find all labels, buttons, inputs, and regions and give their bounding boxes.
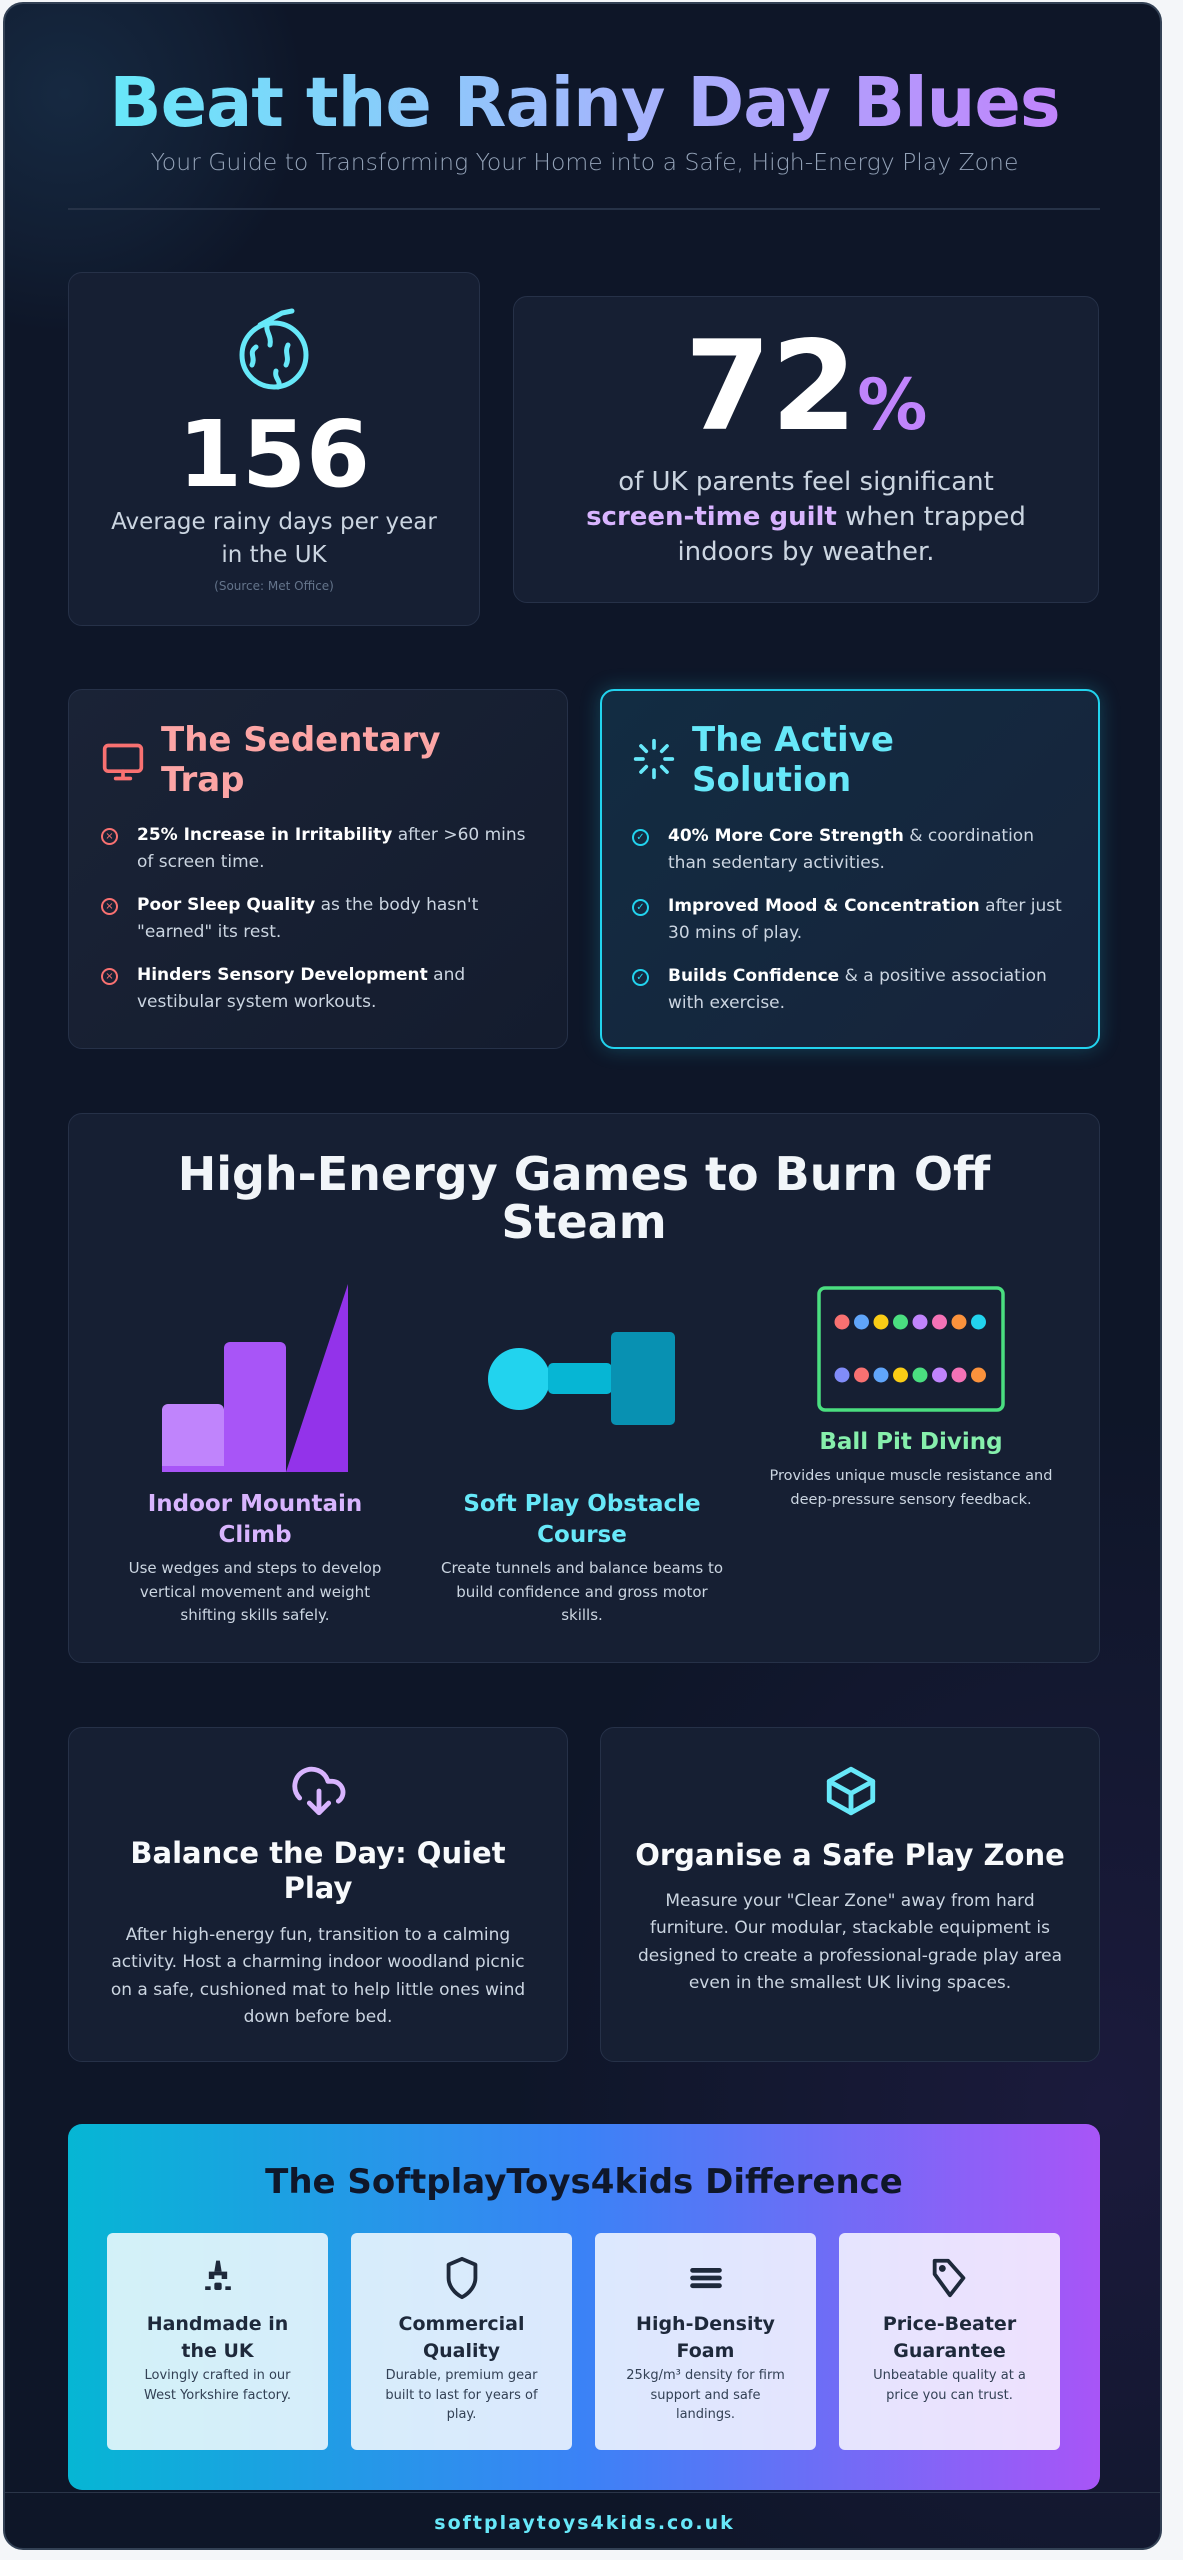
bullet list: × xyxy=(105,901,114,912)
icon: cloud download xyxy=(292,1766,346,1816)
description: Lovingly crafted in our West Yorkshire factory. xyxy=(144,2368,291,2402)
heading: Organise a Safe Play Zone xyxy=(635,1838,1065,1872)
heading: Trap xyxy=(161,760,245,800)
icon: handmade xyxy=(205,2260,231,2290)
stat card: rainy days xyxy=(68,272,480,626)
illustration: wedges and steps xyxy=(162,1284,348,1472)
heading: High-Energy Games to Burn Off Steam xyxy=(178,1147,990,1249)
source: (Source: Met Office) xyxy=(214,579,334,593)
game: indoor mountain climb xyxy=(129,1284,381,1624)
illustration: obstacle shapes xyxy=(488,1332,675,1425)
panel: sedentary trap xyxy=(68,689,568,1049)
title: Beat the Rainy Day Blues xyxy=(109,63,1060,143)
illustration: ball pit xyxy=(817,1286,1005,1412)
number 72%: 72% xyxy=(685,315,927,459)
description: Unbeatable quality at a price you can trust. xyxy=(873,2368,1026,2402)
icon: layers xyxy=(690,2268,722,2288)
game: soft play obstacle course xyxy=(441,1332,723,1624)
heading: The Sedentary xyxy=(161,720,441,760)
description: 25kg/m³ density for firm support and safe landings. xyxy=(626,2368,785,2422)
bullet list: Improved Mood & Concentration after just 30 mins of play. xyxy=(668,896,1062,943)
panel: the difference xyxy=(68,2124,1100,2490)
icon: monitor xyxy=(102,744,144,780)
footer: softplaytoys4kids.co.uk xyxy=(434,2512,735,2534)
heading: Balance the Day: Quiet Play xyxy=(130,1836,506,1905)
heading xyxy=(161,720,441,800)
bullet list: ✓ xyxy=(636,972,645,983)
icon: sparkle loader xyxy=(634,738,674,780)
description: Measure your "Clear Zone" away from hard furniture. Our modular, stackable equipment is designed to create a professional-grade play area even in the smallest UK living spaces. xyxy=(638,1891,1062,1993)
description: After high-energy fun, transition to a calming activity. Host a charming indoor woodland picnic on a safe, cushioned mat to help little ones wind down before bed. xyxy=(111,1925,525,2027)
panel: active solution xyxy=(600,689,1100,1049)
description: Provides unique muscle resistance and deep-pressure sensory feedback. xyxy=(770,1468,1052,1508)
feature: handmade xyxy=(107,2233,328,2450)
bullet list: 25% Increase in Irritability after >60 mins of screen time. xyxy=(137,825,526,872)
bullet list: ✓ xyxy=(636,902,645,913)
bullet list: Builds Confidence & a positive association with exercise. xyxy=(668,966,1047,1013)
number 156: 156 xyxy=(178,401,370,508)
title: Handmade in the UK xyxy=(147,2313,288,2362)
feature: high-density foam xyxy=(595,2233,816,2450)
bullet list: × xyxy=(105,971,114,982)
heading: The SoftplayToys4kids Difference xyxy=(265,2162,903,2202)
description: Use wedges and steps to develop vertical movement and weight shifting skills safely. xyxy=(129,1559,381,1624)
icon: box xyxy=(826,1766,876,1816)
title: Ball Pit Diving xyxy=(819,1429,1003,1455)
text: of UK parents feel significant screen-time guilt when trapped indoors by weather. xyxy=(586,467,1026,567)
title: Soft Play Obstacle Course xyxy=(463,1491,701,1548)
panel: organise safe play zone xyxy=(600,1727,1100,2062)
feature: commercial quality xyxy=(351,2233,572,2450)
subtitle: Your Guide to Transforming Your Home into a Safe, High-Energy Play Zone xyxy=(151,148,1018,176)
icon: shield xyxy=(446,2256,478,2300)
panel: high-energy games xyxy=(68,1113,1100,1663)
bullet list: × xyxy=(105,831,114,842)
game: ball pit diving xyxy=(770,1286,1052,1508)
feature: price-beater xyxy=(839,2233,1060,2450)
title: Indoor Mountain Climb xyxy=(148,1491,362,1548)
bullet list: ✓ xyxy=(636,832,645,843)
title: High-Density Foam xyxy=(636,2313,775,2362)
heading: The Active xyxy=(692,720,894,760)
bullet list: 40% More Core Strength & coordination than sedentary activities. xyxy=(668,826,1034,873)
bullet list xyxy=(632,826,1062,1013)
title: Commercial Quality xyxy=(399,2313,524,2362)
description: Create tunnels and balance beams to build confidence and gross motor skills. xyxy=(441,1559,723,1624)
label: Average rainy days per year in the UK xyxy=(111,509,437,568)
description: Durable, premium gear built to last for years of play. xyxy=(385,2368,538,2422)
stat card: screen-time guilt xyxy=(513,296,1099,603)
heading: Solution xyxy=(692,760,851,800)
title: Price-Beater Guarantee xyxy=(883,2313,1016,2362)
heading xyxy=(692,720,894,800)
icon: tag xyxy=(932,2258,966,2298)
icon: rain globe xyxy=(240,308,308,390)
panel: quiet play xyxy=(68,1727,568,2062)
bullet list: Hinders Sensory Development and vestibular system workouts. xyxy=(137,965,465,1012)
bullet list: Poor Sleep Quality as the body hasn't "earned" its rest. xyxy=(137,895,478,942)
bullet list xyxy=(101,825,526,1012)
